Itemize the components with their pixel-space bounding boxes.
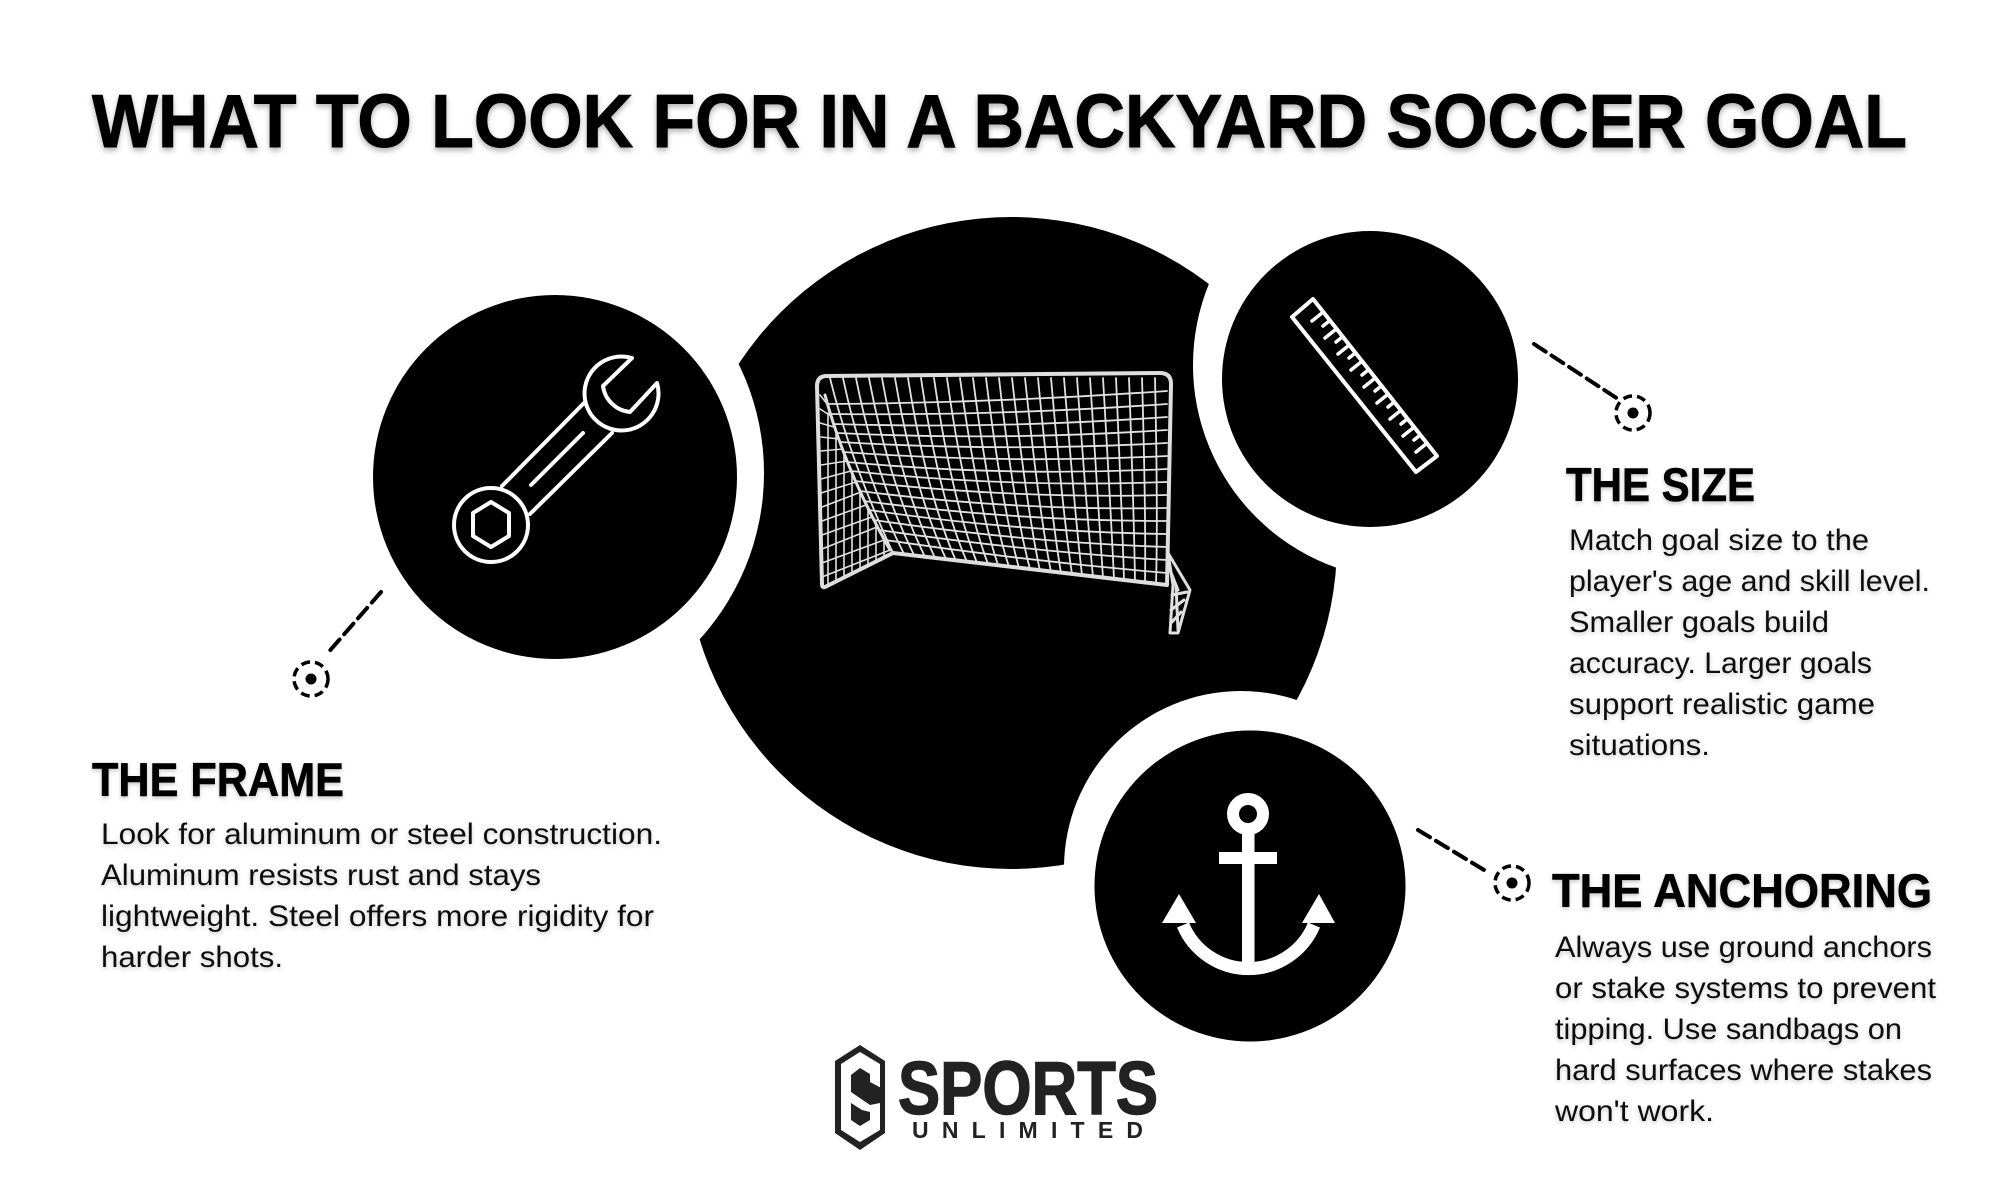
text block: the anchoring: tipping. Use sandbags on xyxy=(1555,1013,1902,1046)
text block: the frame: lightweight. Steel offers more rigidity for xyxy=(101,900,654,933)
text block: the anchoring: Always use ground anchors xyxy=(1555,931,1932,964)
goal net back panel xyxy=(828,378,1167,584)
panel: frame circle xyxy=(373,295,737,659)
text block: the size: Smaller goals build xyxy=(1569,606,1829,639)
text block: the size: THE SIZE xyxy=(1566,458,1755,511)
icon: wrench xyxy=(454,356,659,562)
text block: the size: situations. xyxy=(1569,729,1710,762)
text block: the anchoring xyxy=(1552,864,1936,1128)
icon: ruler xyxy=(1292,299,1437,472)
text block: the size: support realistic game xyxy=(1569,688,1875,721)
text block: the anchoring: THE ANCHORING xyxy=(1552,864,1932,917)
text block: the frame xyxy=(92,753,662,974)
text block: the frame: harder shots. xyxy=(101,941,283,974)
soccer goal illustration xyxy=(817,373,1190,633)
panel: size circle xyxy=(1222,231,1518,527)
text block: the frame: Aluminum resists rust and stays xyxy=(101,859,541,892)
text block: the size xyxy=(1566,458,1930,762)
goal frame xyxy=(817,373,1171,587)
logo: Sports Unlimited xyxy=(835,1045,1158,1150)
callout marker: anchoring xyxy=(1418,830,1529,900)
text block: the frame: Look for aluminum or steel construction. xyxy=(101,818,662,851)
central goal circle xyxy=(270,150,1623,1045)
text block: the size: accuracy. Larger goals xyxy=(1569,647,1872,680)
goal net side panel xyxy=(820,395,890,585)
text block: the size: Match goal size to the xyxy=(1569,524,1869,557)
text block: the anchoring: or stake systems to prevent xyxy=(1555,972,1936,1005)
text block: the anchoring: won't work. xyxy=(1554,1095,1714,1128)
panel: anchoring circle xyxy=(1094,730,1406,1042)
logo hexagon mark xyxy=(835,1045,885,1150)
title: WHAT TO LOOK FOR IN A BACKYARD SOCCER GOAL xyxy=(92,79,1907,163)
icon: anchor xyxy=(1162,799,1335,975)
text block: the frame: THE FRAME xyxy=(92,753,344,806)
text block: the anchoring: hard surfaces where stakes xyxy=(1555,1054,1932,1087)
text block: the size: player's age and skill level. xyxy=(1569,565,1930,598)
logo: Sports Unlimited: UNLIMITED xyxy=(912,1117,1143,1143)
loose net corner xyxy=(1168,553,1190,633)
logo: Sports Unlimited: SPORTS xyxy=(898,1046,1158,1130)
callout marker: size xyxy=(1534,344,1650,430)
callout marker: frame xyxy=(294,592,381,696)
